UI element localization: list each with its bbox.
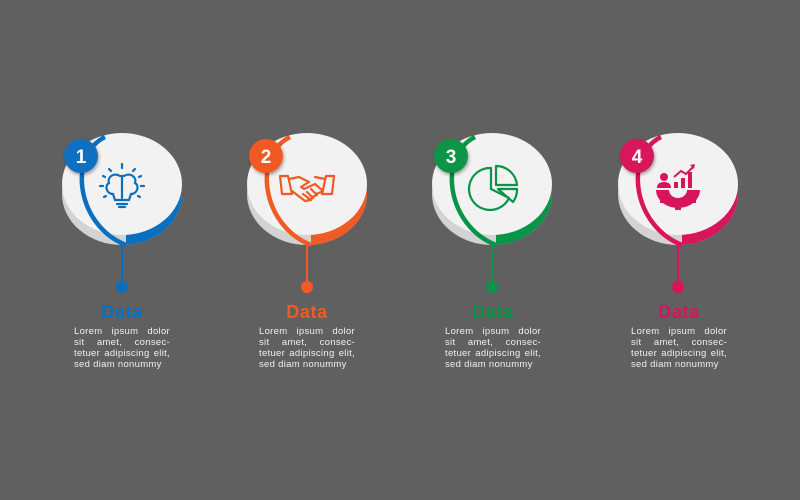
step 2 [247, 133, 367, 293]
text block 2: sit amet, consec- [259, 337, 355, 348]
text block 2 [259, 302, 355, 370]
step 1 [62, 133, 182, 293]
text block 3: Lorem ipsum dolor [445, 326, 541, 337]
icon: handshake [280, 176, 334, 201]
text block 1: sit amet, consec- [74, 337, 170, 348]
text block 3: tetuer adipiscing elit, [445, 348, 541, 359]
icon: pie chart [469, 166, 517, 210]
badge 2 [249, 139, 283, 173]
text block 4: sit amet, consec- [631, 337, 727, 348]
step 3 [432, 133, 552, 293]
text block 4: tetuer adipiscing elit, [631, 348, 727, 359]
text block 1: sed diam nonummy [74, 359, 162, 370]
badge 3: 3 [446, 147, 456, 168]
badge 3 [434, 139, 468, 173]
text block 1 [74, 302, 170, 370]
text block 3: Data [472, 302, 514, 322]
text block 2: tetuer adipiscing elit, [259, 348, 355, 359]
icon: person chart gear [656, 172, 700, 210]
badge 2: 2 [261, 147, 271, 168]
badge 1: 1 [76, 147, 87, 168]
text block 4: Lorem ipsum dolor [631, 326, 727, 337]
badge 1 [64, 139, 98, 173]
badge 4: 4 [632, 147, 643, 168]
text block 3: sed diam nonummy [445, 359, 533, 370]
step 4 [618, 133, 738, 293]
text block 2: sed diam nonummy [259, 359, 347, 370]
text block 4: Data [658, 302, 700, 322]
text block 1: Data [101, 302, 143, 322]
text block 1: Lorem ipsum dolor [74, 326, 170, 337]
icon: brain bulb [100, 164, 144, 207]
text block 3: sit amet, consec- [445, 337, 541, 348]
badge 4 [620, 139, 654, 173]
text block 2: Data [286, 302, 328, 322]
text block 4 [631, 302, 727, 370]
text block 3 [445, 302, 541, 370]
text block 4: sed diam nonummy [631, 359, 719, 370]
text block 1: tetuer adipiscing elit, [74, 348, 170, 359]
text block 2: Lorem ipsum dolor [259, 326, 355, 337]
